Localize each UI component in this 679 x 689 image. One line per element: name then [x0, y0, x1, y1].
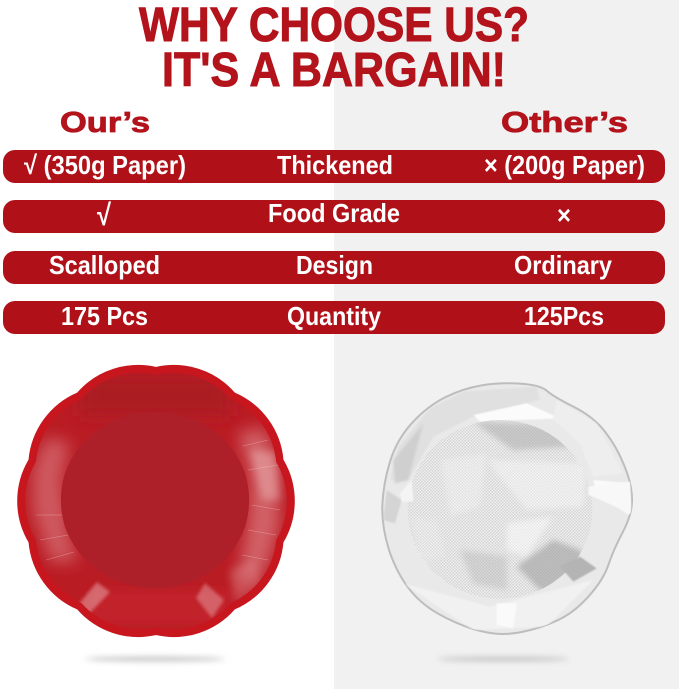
- title: [139, 0, 529, 97]
- background: white left half: [0, 0, 334, 689]
- row: Food Grade: ×: [557, 200, 571, 230]
- row: Thickened: × (200g Paper): [484, 150, 645, 180]
- row: Quantity: Quantity: [287, 301, 381, 331]
- row: Design: Design: [296, 250, 373, 280]
- title: WHY CHOOSE US?: [139, 0, 529, 52]
- row: Food Grade: [3, 198, 665, 233]
- column heading: Other's: Other’s: [501, 107, 628, 139]
- background: grey right half: [334, 0, 679, 689]
- row: Food Grade: √: [97, 199, 111, 232]
- row: Food Grade: Food Grade: [268, 198, 400, 228]
- row: Thickened: Thickened: [277, 150, 393, 180]
- row: Thickened: [3, 150, 665, 183]
- row: Thickened: √ (350g Paper): [24, 150, 186, 180]
- row: Quantity: 125Pcs: [524, 301, 604, 331]
- title: IT'S A BARGAIN!: [162, 44, 506, 97]
- textured centre of white plate: [403, 417, 597, 603]
- row: Design: [3, 250, 665, 284]
- row: Design: Scalloped: [49, 250, 160, 280]
- row: Quantity: 175 Pcs: [61, 301, 148, 331]
- white plate shadow: [437, 657, 569, 661]
- red scalloped plate: [15, 360, 300, 645]
- crumpled white plate: [382, 383, 632, 634]
- column heading: Our's: Our’s: [60, 107, 150, 139]
- red plate shadow: [85, 657, 225, 661]
- row: Quantity: [3, 301, 665, 334]
- row: Design: Ordinary: [514, 250, 612, 280]
- red plate flat base: [61, 412, 249, 588]
